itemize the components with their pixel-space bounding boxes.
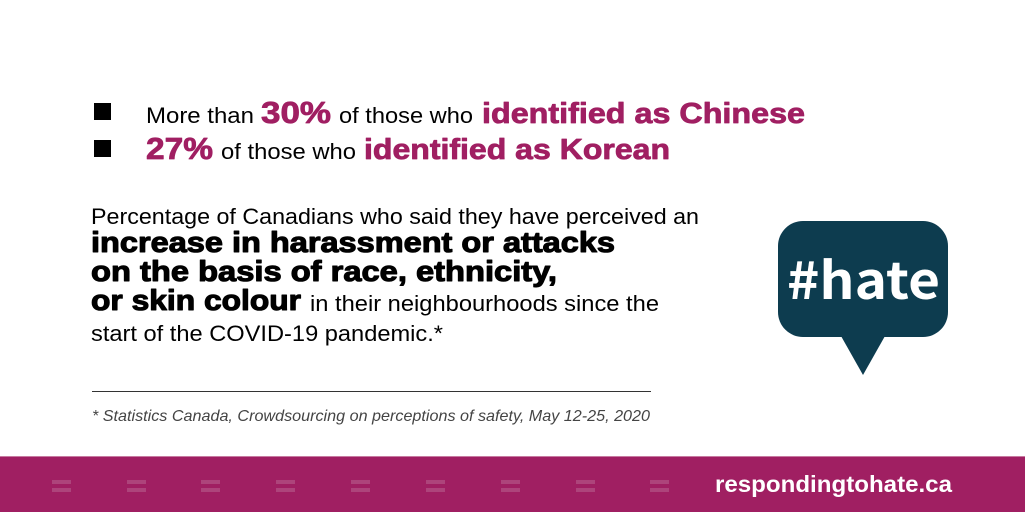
statistic: Chinese: identified as Chinese — [482, 98, 805, 130]
website URL: respondingtohate.ca — [715, 471, 952, 497]
icon: #hate speech bubble: #hate — [787, 240, 940, 314]
bullet list — [94, 95, 805, 166]
statistic: Chinese: More than — [146, 103, 254, 128]
source footnote: * Statistics Canada, Crowdsourcing on perceptions of safety, May 12-25, 2020 — [92, 408, 650, 425]
statistic: Korean: 27% — [146, 131, 213, 166]
footer band — [0, 456, 1025, 512]
description text block: or skin colour — [91, 285, 301, 317]
decorative equals marks — [52, 480, 669, 492]
bullet: Chinese — [94, 103, 111, 120]
description text block: start of the COVID-19 pandemic.* — [91, 321, 443, 346]
description text block: in their neighbourhoods since the — [310, 291, 659, 316]
statistic: Korean: identified as Korean — [364, 134, 670, 166]
description text block: Percentage of Canadians who said they have perceived an — [91, 204, 699, 229]
icon: #hate speech bubble — [778, 221, 948, 375]
statistic: Korean — [146, 131, 670, 166]
statistic: Chinese — [146, 95, 805, 130]
bullet: Korean — [94, 140, 111, 157]
description text block — [91, 204, 699, 346]
statistic: Chinese: of those who — [339, 103, 473, 128]
description text block: increase in harassment or attacks — [91, 227, 615, 259]
statistic: Korean: of those who — [221, 139, 356, 164]
statistic: Chinese: 30% — [261, 95, 331, 130]
description text block: on the basis of race, ethnicity, — [91, 256, 557, 288]
